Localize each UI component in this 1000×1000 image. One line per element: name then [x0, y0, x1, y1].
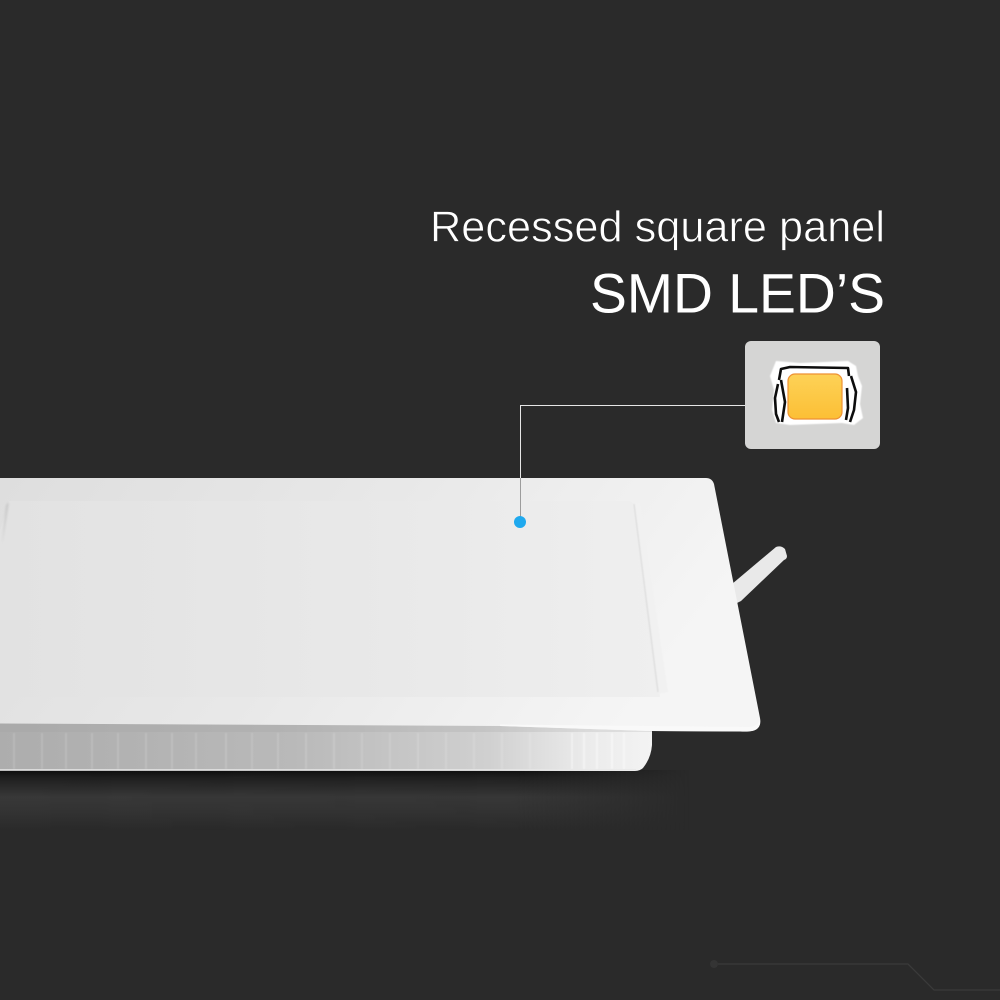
panel frame: [0, 478, 760, 732]
heading: SMD LED'S: SMD LED’S: [590, 262, 885, 324]
decorative circuit line: [710, 960, 1000, 990]
recessed light surface: [0, 501, 660, 697]
icon: SMD LED chip close-up: [745, 341, 880, 449]
tension clip: [732, 546, 787, 603]
frame front edge: [500, 720, 760, 732]
housing ribs: [14, 733, 624, 769]
LED panel product: [0, 478, 787, 771]
title: Recessed square panel: Recessed square panel: [430, 202, 885, 252]
callout leader line: [520, 406, 745, 518]
panel shadow: [0, 771, 634, 814]
housing bottom highlight: [0, 769, 636, 771]
housing top shade band: [0, 722, 652, 732]
panel housing: [0, 722, 652, 771]
marker dot: [514, 516, 526, 528]
recess right wall: [633, 503, 668, 694]
recess left wall: [2, 502, 9, 545]
